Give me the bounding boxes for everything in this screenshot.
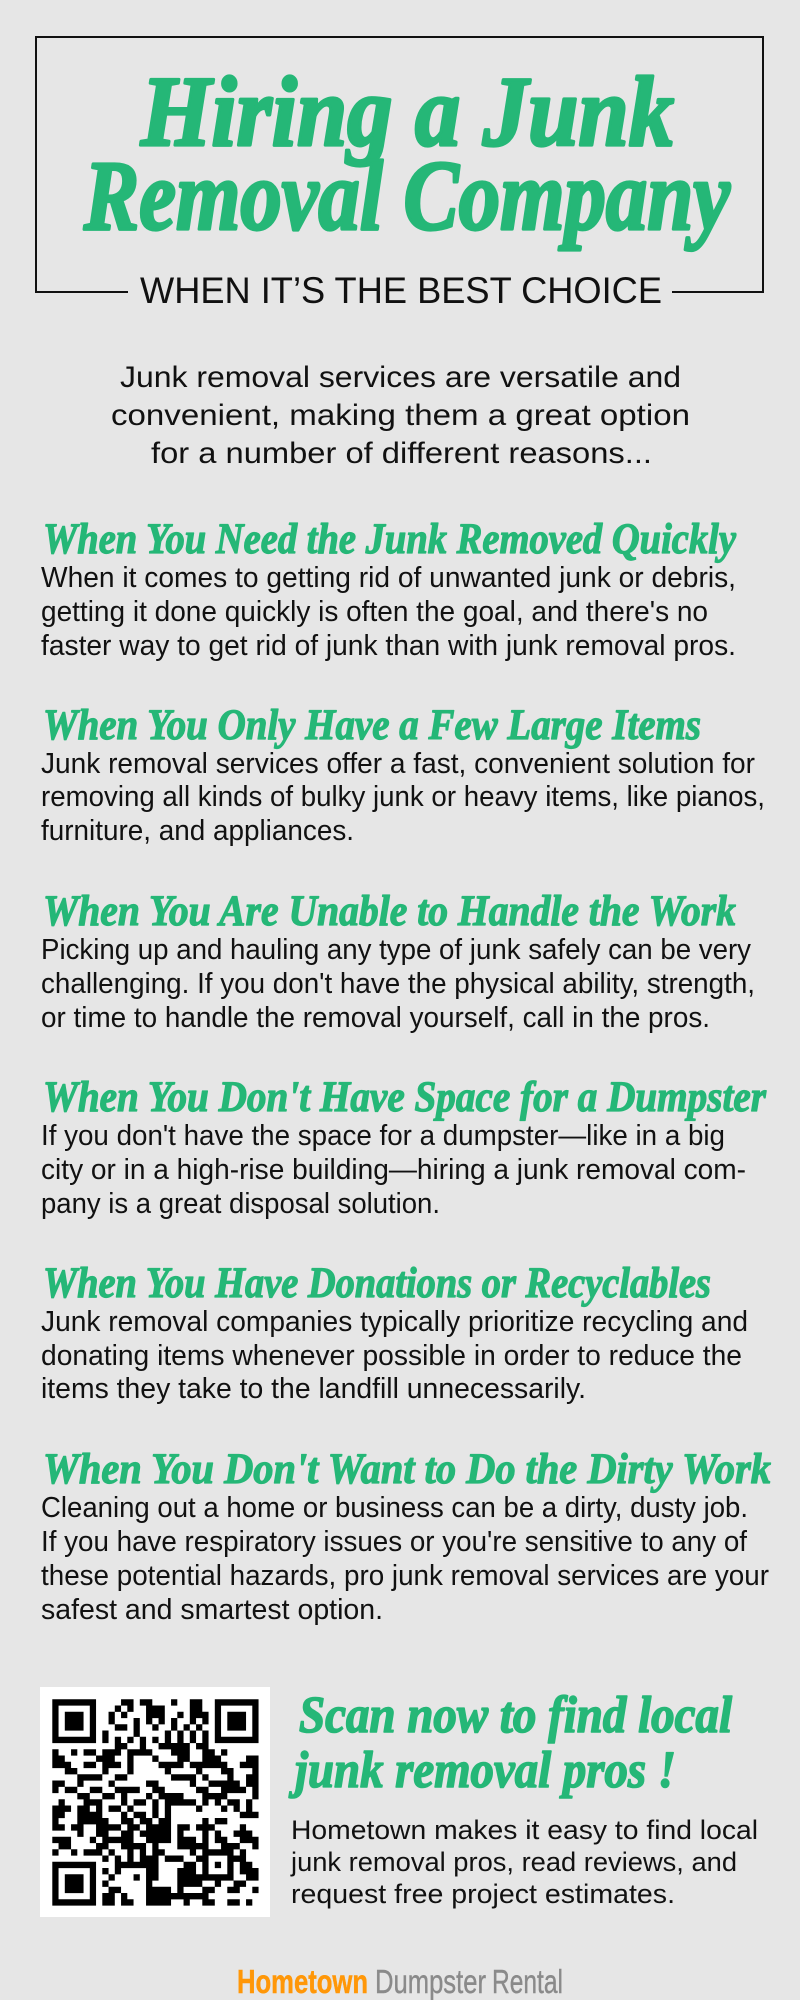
section body: items they take to the landfill unnecessarily. (41, 1373, 586, 1405)
section: needed quickly (41, 516, 737, 662)
section: few large items (41, 702, 765, 847)
intro text: convenient, making them a great option (111, 399, 690, 432)
intro text (111, 361, 690, 470)
section heading: When You Are Unable to Handle the Work (43, 888, 736, 935)
section body: furniture, and appliances. (41, 815, 354, 847)
call to action text: junk removal pros, read reviews, and (290, 1847, 737, 1877)
call to action heading (289, 1687, 732, 1799)
section body: Picking up and hauling any type of junk safely can be very (41, 934, 751, 966)
section: donations or recyclables (41, 1260, 748, 1405)
section: dirty work (41, 1446, 771, 1626)
section body: When it comes to getting rid of unwanted junk or debris, (41, 562, 736, 594)
intro text: for a number of different reasons... (151, 437, 652, 470)
section body: removing all kinds of bulky junk or heavy items, like pianos, (41, 781, 765, 813)
call to action text (290, 1815, 758, 1909)
call to action text: Hometown makes it easy to find local (291, 1815, 758, 1845)
intro text: Junk removal services are versatile and (120, 361, 681, 394)
section body: or time to handle the removal yourself, call in the pros. (41, 1002, 710, 1034)
call to action heading: junk removal pros ! (289, 1742, 676, 1799)
QR code (40, 1687, 270, 1917)
section body: these potential hazards, pro junk removal services are your (41, 1560, 769, 1592)
section body (41, 934, 755, 1034)
section heading: When You Have Donations or Recyclables (43, 1260, 711, 1307)
section body: pany is a great disposal solution. (41, 1188, 440, 1220)
footer logo: Hometown (237, 1963, 368, 2000)
section body (41, 1492, 769, 1626)
section heading: When You Need the Junk Removed Quickly (43, 516, 737, 563)
section body (41, 1120, 746, 1220)
section body: If you don't have the space for a dumpster—like in a big (41, 1120, 725, 1152)
section body: Cleaning out a home or business can be a dirty, dusty job. (41, 1492, 748, 1524)
footer logo: Rental (492, 1963, 563, 2000)
call to action text: request free project estimates. (291, 1879, 675, 1909)
section body: Junk removal companies typically prioritize recycling and (41, 1306, 748, 1338)
section: no space for a dumpster (41, 1074, 767, 1220)
section body: getting it done quickly is often the goal, and there's no (41, 596, 708, 628)
section body: Junk removal services offer a fast, convenient solution for (41, 748, 755, 780)
title frame (36, 37, 763, 292)
section body (41, 748, 765, 847)
section body: donating items whenever possible in order to reduce the (41, 1340, 742, 1372)
footer logo: Dumpster (375, 1963, 486, 2000)
section: unable to handle the work (41, 888, 755, 1034)
title: Hiring a Junk (140, 56, 674, 167)
section body: If you have respiratory issues or you're sensitive to any of (41, 1526, 748, 1558)
subtitle: WHEN IT’S THE BEST CHOICE (140, 270, 662, 311)
section heading: When You Don't Want to Do the Dirty Work (43, 1446, 771, 1493)
section body: challenging. If you don't have the physical ability, strength, (41, 968, 755, 1000)
section body (41, 562, 736, 662)
section heading: When You Only Have a Few Large Items (43, 702, 701, 749)
call to action heading: Scan now to find local (299, 1687, 732, 1744)
section body (41, 1306, 748, 1405)
footer logo (237, 1963, 563, 2000)
title (83, 56, 730, 251)
section body: faster way to get rid of junk than with junk removal pros. (41, 630, 736, 662)
section body: safest and smartest option. (41, 1594, 383, 1626)
section body: city or in a high-rise building—hiring a junk removal com- (41, 1154, 746, 1186)
